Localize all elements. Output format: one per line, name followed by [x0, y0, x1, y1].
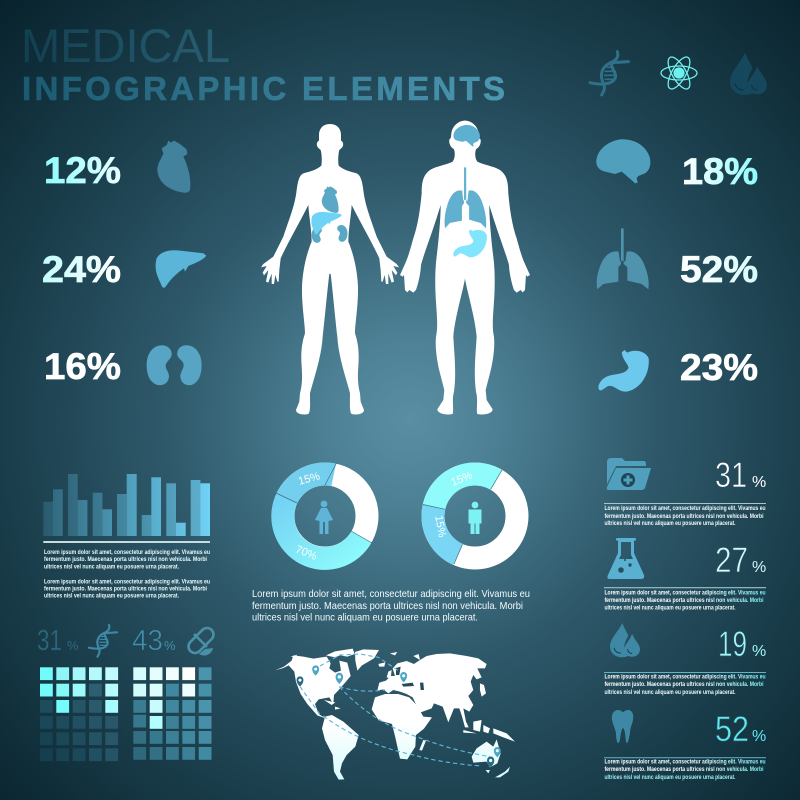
description: ultrices nisl vel nunc aliquam eu posuere urna placerat. [604, 604, 736, 612]
stat: 43%: 43 [132, 625, 163, 657]
bar chart caption [43, 541, 210, 600]
icon: liver [156, 250, 206, 288]
bar chart caption: ultrices nisl vel nunc aliquam eu posuere urna placerat. [44, 563, 179, 570]
description: ultrices nisl vel nunc aliquam eu posuere urna placerat. [604, 774, 736, 781]
icon: brain [596, 139, 650, 183]
stat: heart 12%: 12% [44, 150, 121, 191]
stat: 31%: 31 [37, 625, 62, 657]
value: 27%: 27 [715, 541, 748, 580]
organ: liver [311, 212, 342, 234]
left square grid: 31% [40, 667, 118, 761]
description [604, 503, 766, 527]
label: 70%: 70% [294, 544, 319, 563]
right panel: tooth 52% [604, 710, 766, 781]
center paragraph: fermentum justo. Maecenas porta ultrices nisl non vehicula. Morbi [252, 601, 523, 612]
icon: stomach [598, 350, 649, 392]
description: ultrices nisl vel nunc aliquam eu posuere urna placerat. [604, 689, 736, 696]
value: 31%: % [752, 474, 766, 491]
donut chart: female [276, 463, 372, 563]
left organ statistics [42, 141, 206, 387]
right square grid: 43% [133, 667, 212, 760]
label: 15%: 15% [297, 470, 322, 488]
icon: atom [661, 54, 697, 92]
world map [275, 649, 515, 780]
description: fermentum justo. Maecenas porta ultrices nisl non vehicula. Morbi [604, 513, 764, 520]
center paragraph: ultrices nisl vel nunc aliquam eu posuere urna placerat. [252, 612, 478, 624]
description [604, 757, 766, 781]
value: 52%: % [752, 728, 766, 745]
organ: heart [322, 186, 339, 213]
icon: water drops [610, 623, 640, 657]
value: 52%: 52 [715, 710, 749, 749]
icon: tooth [612, 710, 633, 743]
description: fermentum justo. Maecenas porta ultrices nisl non vehicula. Morbi [604, 766, 764, 773]
value: 19%: 19 [718, 625, 747, 664]
value: 31%: 31 [715, 456, 747, 495]
map pins [297, 665, 501, 767]
stat: lungs 52%: 52% [680, 249, 758, 290]
center paragraph: Lorem ipsum dolor sit amet, consectetur adipiscing elit. Vivamus eu [252, 589, 530, 600]
description [604, 672, 766, 696]
label: 15% side: 15% [432, 515, 448, 539]
right panel: lab 27% [604, 538, 766, 612]
bar chart caption: ultrices nisl vel nunc aliquam eu posuere urna placerat. [44, 593, 179, 600]
stat: 31%: % [67, 638, 79, 653]
female body figure [261, 124, 399, 414]
organ: lungs [445, 167, 486, 228]
value: 27%: % [752, 559, 766, 576]
stat: 43%: % [164, 638, 176, 653]
icon: man [468, 502, 482, 534]
value: 19%: % [752, 643, 766, 660]
title: MEDICAL [21, 19, 230, 72]
icon: heart [157, 141, 190, 193]
male body figure [400, 121, 530, 414]
icon: flask [607, 538, 644, 579]
bar chart caption: Lorem ipsum dolor sit amet, consectetur adipiscing elit. Vivamus eu [44, 578, 210, 585]
description: ultrices nisl vel nunc aliquam eu posuere urna placerat. [604, 520, 736, 527]
right panel: records 31% [604, 456, 766, 527]
description: fermentum justo. Maecenas porta ultrices nisl non vehicula. Morbi [604, 597, 764, 604]
icon: dna [590, 52, 628, 95]
stat: stomach 23%: 23% [680, 347, 758, 388]
icon: woman [315, 501, 333, 534]
dashed routes [300, 654, 490, 766]
icon: dna small [89, 625, 117, 657]
bar chart [43, 474, 210, 536]
icon: kidneys [147, 345, 202, 385]
label: 15% top: 15% [449, 469, 475, 489]
icon: pill [186, 625, 216, 656]
icon: lungs [597, 228, 649, 289]
top right icons [590, 52, 767, 95]
center paragraph [252, 589, 530, 624]
bar chart caption: fermentum justo. Maecenas porta ultrices nisl non vehicula. Morbi [44, 556, 207, 563]
right panel: drops 19% [604, 623, 766, 696]
right organ statistics [596, 139, 758, 392]
bar chart caption: fermentum justo. Maecenas porta ultrices nisl non vehicula. Morbi [44, 586, 207, 592]
donut chart: male [423, 469, 517, 564]
organ: kidneys [312, 225, 348, 243]
title: INFOGRAPHIC ELEMENTS [22, 70, 505, 107]
bar chart caption: Lorem ipsum dolor sit amet, consectetur adipiscing elit. Vivamus eu [44, 549, 210, 556]
organ: stomach [453, 229, 487, 257]
icon: water drops [730, 53, 767, 95]
icon: medical folder [607, 458, 651, 490]
stat: liver 24%: 24% [42, 249, 121, 290]
stat: kidneys 16%: 16% [44, 346, 121, 387]
title [21, 19, 505, 107]
stat row: 31% and 43% [37, 625, 216, 657]
description [604, 587, 766, 612]
stat: brain 18%: 18% [682, 151, 758, 192]
organ: brain [453, 125, 480, 146]
description: fermentum justo. Maecenas porta ultrices nisl non vehicula. Morbi [604, 681, 764, 688]
